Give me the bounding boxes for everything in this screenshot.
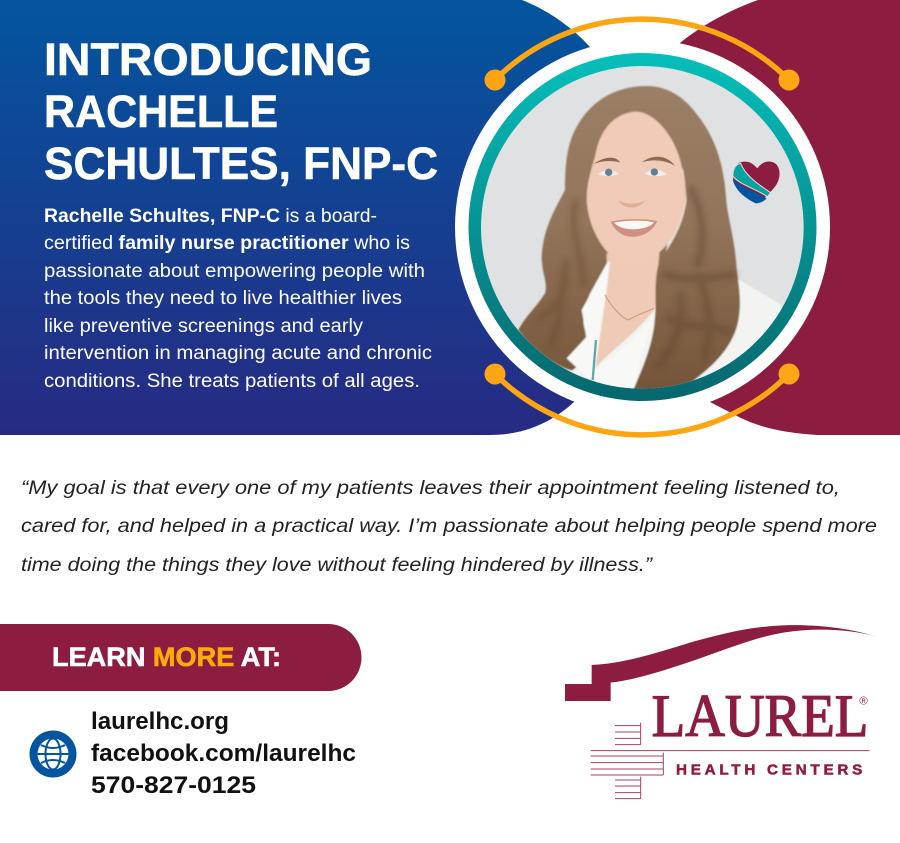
logo registered mark: ® [859,696,868,708]
banner: learn more at [0,624,361,691]
text block: biography: like preventive screenings and early [44,316,364,337]
photo: portrait of Rachelle Schultes [480,65,805,390]
title: SCHULTES, FNP-C [44,138,438,189]
text block: contact details: 570-827-0125 [91,772,256,799]
text block: patient care quote: cared for, and helped in a practical way. I’m passionate about helping people spend more [21,516,877,537]
panel: blue intro background [0,0,640,435]
text block: patient care quote: time doing the things they love without feeling hindered by illness.” [21,555,654,576]
text block: patient care quote [21,478,877,576]
text block: biography: certified family nurse practitioner who is [44,233,410,254]
arc: bottom orange connector [484,364,800,435]
title [44,34,438,189]
text block: biography: conditions. She treats patients of all ages. [44,371,420,392]
logo wordmark: LAUREL [652,683,868,749]
logo subtitle: HEALTH CENTERS [676,761,866,778]
text block: contact details: facebook.com/laurelhc [91,740,356,767]
logo: Laurel Health Centers [565,625,877,799]
panel: maroon background [640,0,900,435]
portrait circle [455,40,830,414]
text block: biography: intervention in managing acute and chronic [44,343,432,364]
logo cross lines [591,723,869,799]
text block: contact details [91,708,356,799]
title: INTRODUCING [44,34,372,85]
banner: learn more at: LEARN MORE AT: [52,642,281,672]
text block: biography [44,206,432,392]
arc: top orange connector [484,19,800,91]
icon: globe [30,730,76,778]
title: RACHELLE [44,86,278,137]
text block: biography: passionate about empowering people with [44,261,425,282]
text block: biography: the tools they need to live healthier lives [44,288,402,309]
icon: heart logo [733,162,780,203]
logo swoosh roof [565,625,877,701]
text block: contact details: laurelhc.org [91,708,229,735]
text block: biography: Rachelle Schultes, FNP-C is a board- [44,206,377,227]
text block: patient care quote: “My goal is that every one of my patients leaves their appointment feeling listened to, [21,478,840,499]
